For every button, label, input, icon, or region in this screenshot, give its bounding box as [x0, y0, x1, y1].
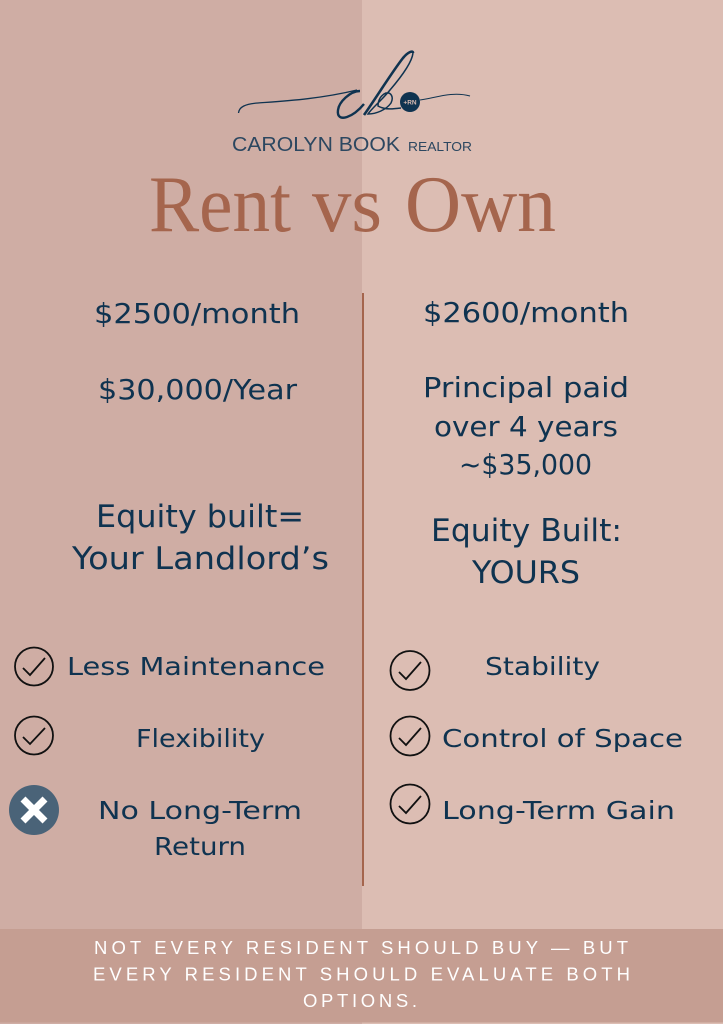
- logo tail swash: [420, 94, 470, 100]
- item: stability: Stability: [485, 652, 600, 681]
- logo signature swash: [238, 90, 357, 113]
- own principal: ~$35,000: [459, 448, 592, 481]
- icon: check: [390, 784, 430, 824]
- icon: check: [390, 651, 430, 690]
- own monthly: $2600/month: [423, 296, 629, 329]
- logo letter b loop: [368, 53, 413, 114]
- rent list: [9, 648, 325, 861]
- title: Own: [405, 161, 556, 249]
- own equity: YOURS: [471, 555, 580, 591]
- rent equity: Your Landlord’s: [71, 541, 329, 577]
- footer text: EVERY RESIDENT SHOULD EVALUATE BOTH: [93, 964, 630, 984]
- item: no long-term return: Return: [154, 832, 246, 861]
- logo name: CAROLYN BOOK: [232, 134, 401, 156]
- item: no long-term return: No Long-Term: [98, 796, 302, 825]
- item: less maintenance: Less Maintenance: [67, 652, 325, 681]
- own equity: Equity Built:: [431, 513, 622, 549]
- center divider: [362, 293, 364, 886]
- logo letter b stem: [364, 52, 413, 115]
- own principal: over 4 years: [434, 410, 618, 443]
- logo: Carolyn Book Realtor: [232, 52, 472, 156]
- rent equity: Equity built=: [96, 499, 304, 535]
- item: long-term gain: Long-Term Gain: [442, 796, 675, 825]
- item: flexibility: Flexibility: [136, 724, 265, 753]
- footer band: [0, 929, 723, 1022]
- item: control of space: Control of Space: [442, 724, 683, 753]
- rent yearly: $30,000/Year: [98, 373, 298, 406]
- icon: check: [15, 648, 53, 686]
- icon: cross: [9, 785, 59, 835]
- logo letter c: [338, 91, 364, 118]
- panel: background rent side: [0, 0, 362, 1024]
- own list: [390, 651, 683, 825]
- own principal: Principal paid: [423, 371, 629, 404]
- title: Rent: [149, 161, 291, 249]
- icon: check: [15, 716, 53, 754]
- rent column figures: [71, 297, 329, 577]
- own column figures: [423, 296, 629, 591]
- rent monthly: $2500/month: [94, 297, 300, 330]
- icon: check: [390, 716, 430, 756]
- title: vs: [312, 161, 382, 249]
- logo realtor label: REALTOR: [408, 140, 472, 154]
- logo badge: [400, 92, 420, 112]
- footer text: NOT EVERY RESIDENT SHOULD BUY — BUT: [94, 937, 628, 958]
- footer text: OPTIONS.: [303, 990, 417, 1011]
- logo badge: +RN: [403, 100, 417, 106]
- panel: background own side: [362, 0, 723, 1024]
